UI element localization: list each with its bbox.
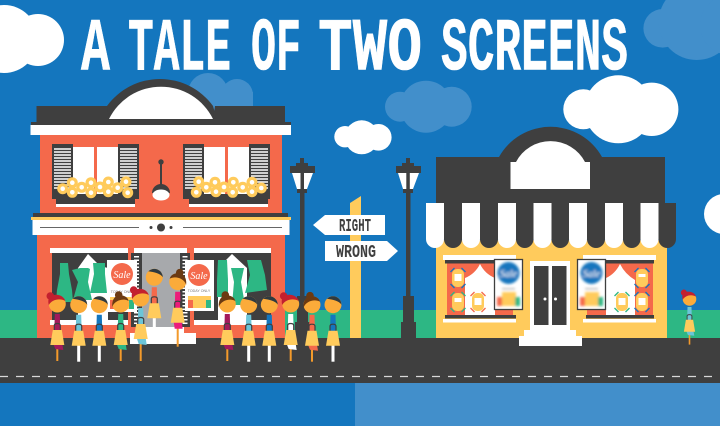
title [81, 8, 628, 92]
title: OF [251, 8, 301, 92]
left upper window [52, 144, 139, 207]
shopper 4 [112, 291, 129, 361]
signpost [313, 196, 398, 338]
arrow sign: right: RIGHT [339, 217, 371, 237]
title: TWO [318, 8, 422, 92]
arrow sign: wrong [325, 241, 398, 263]
shopper in doorway 2 [169, 269, 186, 347]
shopper 9 [280, 292, 299, 361]
shop entrance [130, 248, 196, 344]
yellow shop wall [436, 240, 667, 338]
sale poster left: Sale [113, 270, 131, 281]
cloud: small white centre [334, 120, 392, 154]
white hanging garment [78, 254, 108, 320]
shopper 1 [46, 292, 66, 361]
right upper window [183, 144, 270, 207]
green dress 2 [72, 268, 92, 300]
yellow shop roof with arch [436, 127, 665, 215]
post [350, 196, 361, 338]
road [0, 338, 720, 383]
shopper 10 [303, 292, 320, 362]
blurred poster left: Sale [500, 269, 518, 280]
sale poster right: TODAY ONLY [188, 289, 211, 293]
green dress c [245, 260, 267, 293]
title: A [81, 8, 110, 92]
cloud: top left white [0, 5, 64, 73]
street lamp left [290, 158, 315, 339]
green dress b [231, 268, 245, 305]
shopper 8 [261, 296, 278, 362]
left flower box [57, 176, 133, 198]
shopper in doorway 1 [146, 269, 163, 334]
sale poster right: Sale [190, 271, 208, 282]
green dress a [217, 260, 228, 297]
green ground strip [0, 310, 720, 339]
product tags in windows [450, 268, 650, 312]
sale poster left [107, 260, 137, 312]
title: TALE [128, 8, 231, 92]
shop lower wall [37, 234, 285, 338]
sale poster right [185, 260, 214, 311]
yellow shop right window [583, 255, 656, 322]
right flower box [191, 176, 267, 198]
shop sign band [31, 213, 291, 235]
shopper 7 [240, 296, 257, 362]
shop upper wall [40, 135, 282, 214]
shopper 2 [70, 296, 87, 362]
right display window [194, 248, 271, 325]
white hanging garment right [218, 254, 247, 320]
blurred poster right [578, 260, 606, 310]
arrow sign: right [313, 215, 385, 237]
cloud: pale centre [385, 81, 472, 133]
shopper 5 [130, 286, 149, 361]
shop dome [103, 79, 217, 120]
shopper 11 [324, 296, 342, 362]
cloud: pale behind shop [188, 73, 253, 113]
blurred poster right: Sale [583, 269, 601, 280]
panel: yellow shop [426, 127, 676, 346]
street lamp right [396, 158, 421, 339]
blurred poster left [494, 260, 522, 310]
water left [0, 383, 355, 426]
cloud: large white right [563, 75, 678, 143]
cloud: top right pale [643, 0, 720, 60]
arrow sign: wrong: WRONG [336, 243, 376, 263]
green dress 3 [90, 263, 107, 293]
left display window [50, 248, 128, 325]
shopper queue [46, 269, 342, 362]
wall lamp [152, 159, 170, 200]
shopper 3 [91, 296, 108, 362]
double doors and steps [519, 261, 582, 346]
panel: red shop [30, 79, 291, 344]
lone shopper at right [681, 290, 696, 345]
shop roof [30, 106, 291, 135]
shopper 6 [219, 291, 236, 361]
striped awning [426, 203, 676, 248]
water right [355, 383, 720, 426]
yellow shop left window [443, 255, 516, 322]
cloud: right edge white [704, 194, 720, 234]
green dress 1 [56, 263, 73, 302]
sale poster left: TODAY ONLY [111, 290, 134, 294]
